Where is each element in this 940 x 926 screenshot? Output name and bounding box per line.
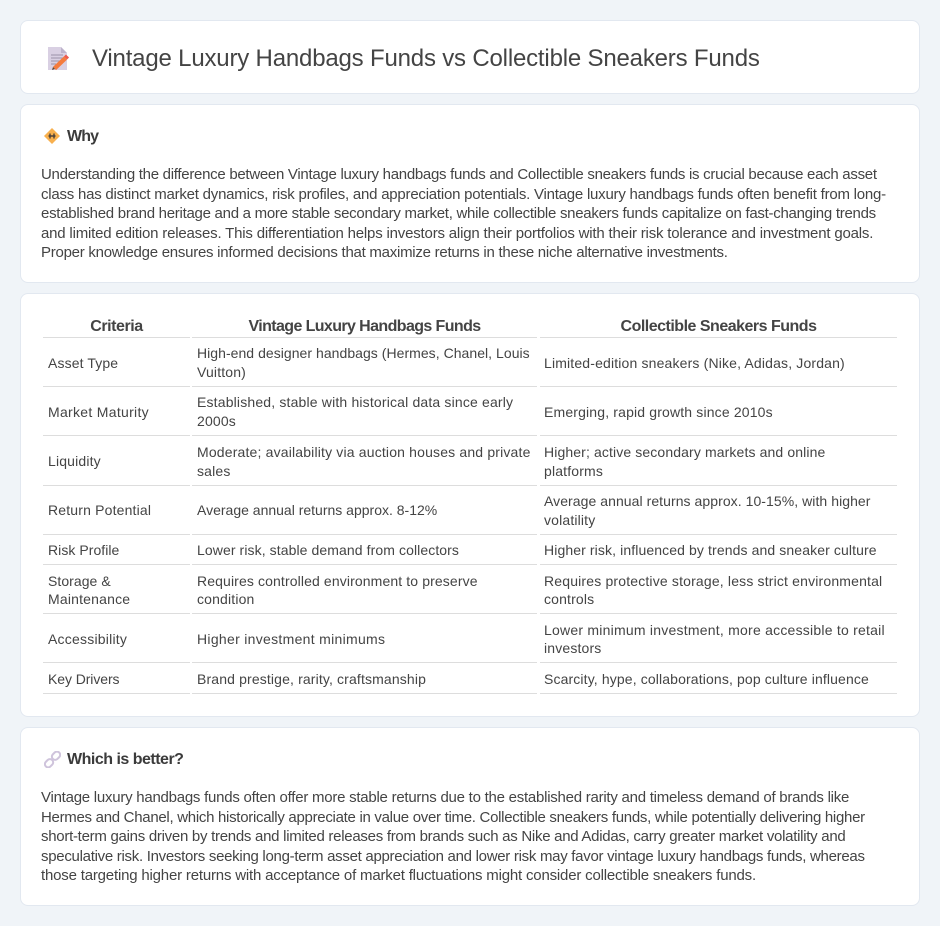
row: storage and maintenance: controls bbox=[544, 591, 594, 607]
row: storage and maintenance: Maintenance bbox=[48, 591, 130, 607]
title: Vintage Luxury Handbags Funds vs Collectible Sneakers Funds bbox=[92, 45, 760, 72]
row: liquidity: Moderate; availability via auction houses and private bbox=[197, 444, 531, 460]
row: liquidity bbox=[48, 444, 825, 479]
text block: why: class has distinct market dynamics, risk profiles, and appreciation potentials. Vintage luxury handbags funds often benefit from long- bbox=[41, 186, 886, 202]
text block: why: Understanding the difference between Vintage luxury handbags funds and Collectible sneakers funds is crucial because each asset bbox=[41, 166, 877, 183]
row: storage and maintenance: condition bbox=[197, 591, 254, 607]
panel: why bbox=[20, 104, 920, 283]
table header: Collectible Sneakers Funds bbox=[621, 318, 816, 335]
row: asset type: Limited-edition sneakers (Nike, Adidas, Jordan) bbox=[544, 355, 845, 371]
row: accessibility bbox=[48, 622, 885, 656]
text block: why: and limited edition releases. This differentiation helps investors align their portfolios with their risk tolerance and investment goals. bbox=[41, 224, 873, 242]
row: accessibility: investors bbox=[544, 640, 601, 656]
row: market maturity: 2000s bbox=[197, 413, 236, 429]
row: market maturity: Market Maturity bbox=[48, 404, 149, 420]
row: liquidity: Liquidity bbox=[48, 453, 101, 469]
row: market maturity: Established, stable with historical data since early bbox=[197, 394, 513, 410]
heading: why: Why bbox=[67, 128, 98, 145]
row: return potential bbox=[48, 493, 870, 528]
row: asset type: Asset Type bbox=[48, 355, 118, 371]
row: asset type: Vuitton) bbox=[197, 364, 246, 380]
heading: which is better: Which is better? bbox=[67, 751, 183, 768]
row: liquidity: sales bbox=[197, 463, 230, 479]
text block: which is better: those targeting higher returns with acceptance of market fluctuations might consider collectible sneakers funds. bbox=[41, 867, 756, 884]
row: accessibility: Higher investment minimums bbox=[197, 631, 385, 647]
row: market maturity bbox=[48, 394, 773, 429]
icon: document with pencil bbox=[48, 47, 69, 70]
row: accessibility: Lower minimum investment, more accessible to retail bbox=[544, 622, 885, 638]
text block: which is better: Hermes and Chanel, which historically appreciate in value over time. Collectible sneakers funds, while potentially delivering higher bbox=[41, 808, 865, 826]
row: key drivers: Key Drivers bbox=[48, 671, 119, 687]
row: liquidity: Higher; active secondary markets and online bbox=[544, 444, 825, 460]
table header: Vintage Luxury Handbags Funds bbox=[248, 318, 481, 335]
row: key drivers: Scarcity, hype, collaborations, pop culture influence bbox=[544, 671, 869, 687]
panel: which is better bbox=[20, 727, 920, 906]
text block: which is better: speculative risk. Investors seeking long-term asset appreciation and lower risk may favor vintage luxury handbags funds, whereas bbox=[41, 848, 865, 864]
row: key drivers bbox=[48, 671, 869, 687]
icon: chain link bbox=[44, 751, 61, 768]
row: asset type: High-end designer handbags (Hermes, Chanel, Louis bbox=[197, 345, 530, 361]
text block: which is better: Vintage luxury handbags funds often offer more stable returns due to the established rarity and timeless demand of brands like bbox=[41, 789, 849, 806]
row: market maturity: Emerging, rapid growth since 2010s bbox=[544, 404, 773, 420]
row: return potential: Return Potential bbox=[48, 502, 151, 518]
row: storage and maintenance: Requires protective storage, less strict environmental bbox=[544, 573, 882, 589]
row: risk profile: Higher risk, influenced by trends and sneaker culture bbox=[544, 542, 877, 558]
row: key drivers: Brand prestige, rarity, craftsmanship bbox=[197, 671, 426, 687]
row: liquidity: platforms bbox=[544, 463, 603, 479]
row: return potential: Average annual returns approx. 10-15%, with higher bbox=[544, 493, 870, 509]
table header bbox=[43, 318, 897, 338]
text block: which is better bbox=[41, 789, 865, 884]
row: risk profile: Lower risk, stable demand from collectors bbox=[197, 542, 459, 558]
row: storage and maintenance: Requires controlled environment to preserve bbox=[197, 573, 478, 589]
panel: comparison table bbox=[20, 293, 920, 717]
row: storage and maintenance: Storage & bbox=[48, 573, 111, 589]
row: storage and maintenance bbox=[48, 573, 882, 607]
row: risk profile: Risk Profile bbox=[48, 542, 119, 558]
text block: which is better: short-term gains driven by trends and limited releases from brands such as Nike and Adidas, carry greater market volatility and bbox=[41, 828, 846, 845]
row: return potential: Average annual returns approx. 8-12% bbox=[197, 502, 437, 518]
table header: Criteria bbox=[90, 318, 143, 335]
row: return potential: volatility bbox=[544, 512, 595, 528]
table: comparison bbox=[43, 318, 897, 694]
panel: title header bbox=[20, 20, 920, 94]
row: risk profile bbox=[48, 542, 877, 558]
text block: why bbox=[41, 166, 886, 261]
text block: why: established brand heritage and a more stable secondary market, while collectible sneakers funds capitalize on fast-changing trends bbox=[41, 205, 876, 222]
text block: why: Proper knowledge ensures informed decisions that maximize returns in these niche alternative investments. bbox=[41, 244, 728, 261]
row: asset type bbox=[48, 345, 845, 380]
icon: diamond sign bbox=[44, 128, 60, 144]
row: accessibility: Accessibility bbox=[48, 631, 127, 647]
